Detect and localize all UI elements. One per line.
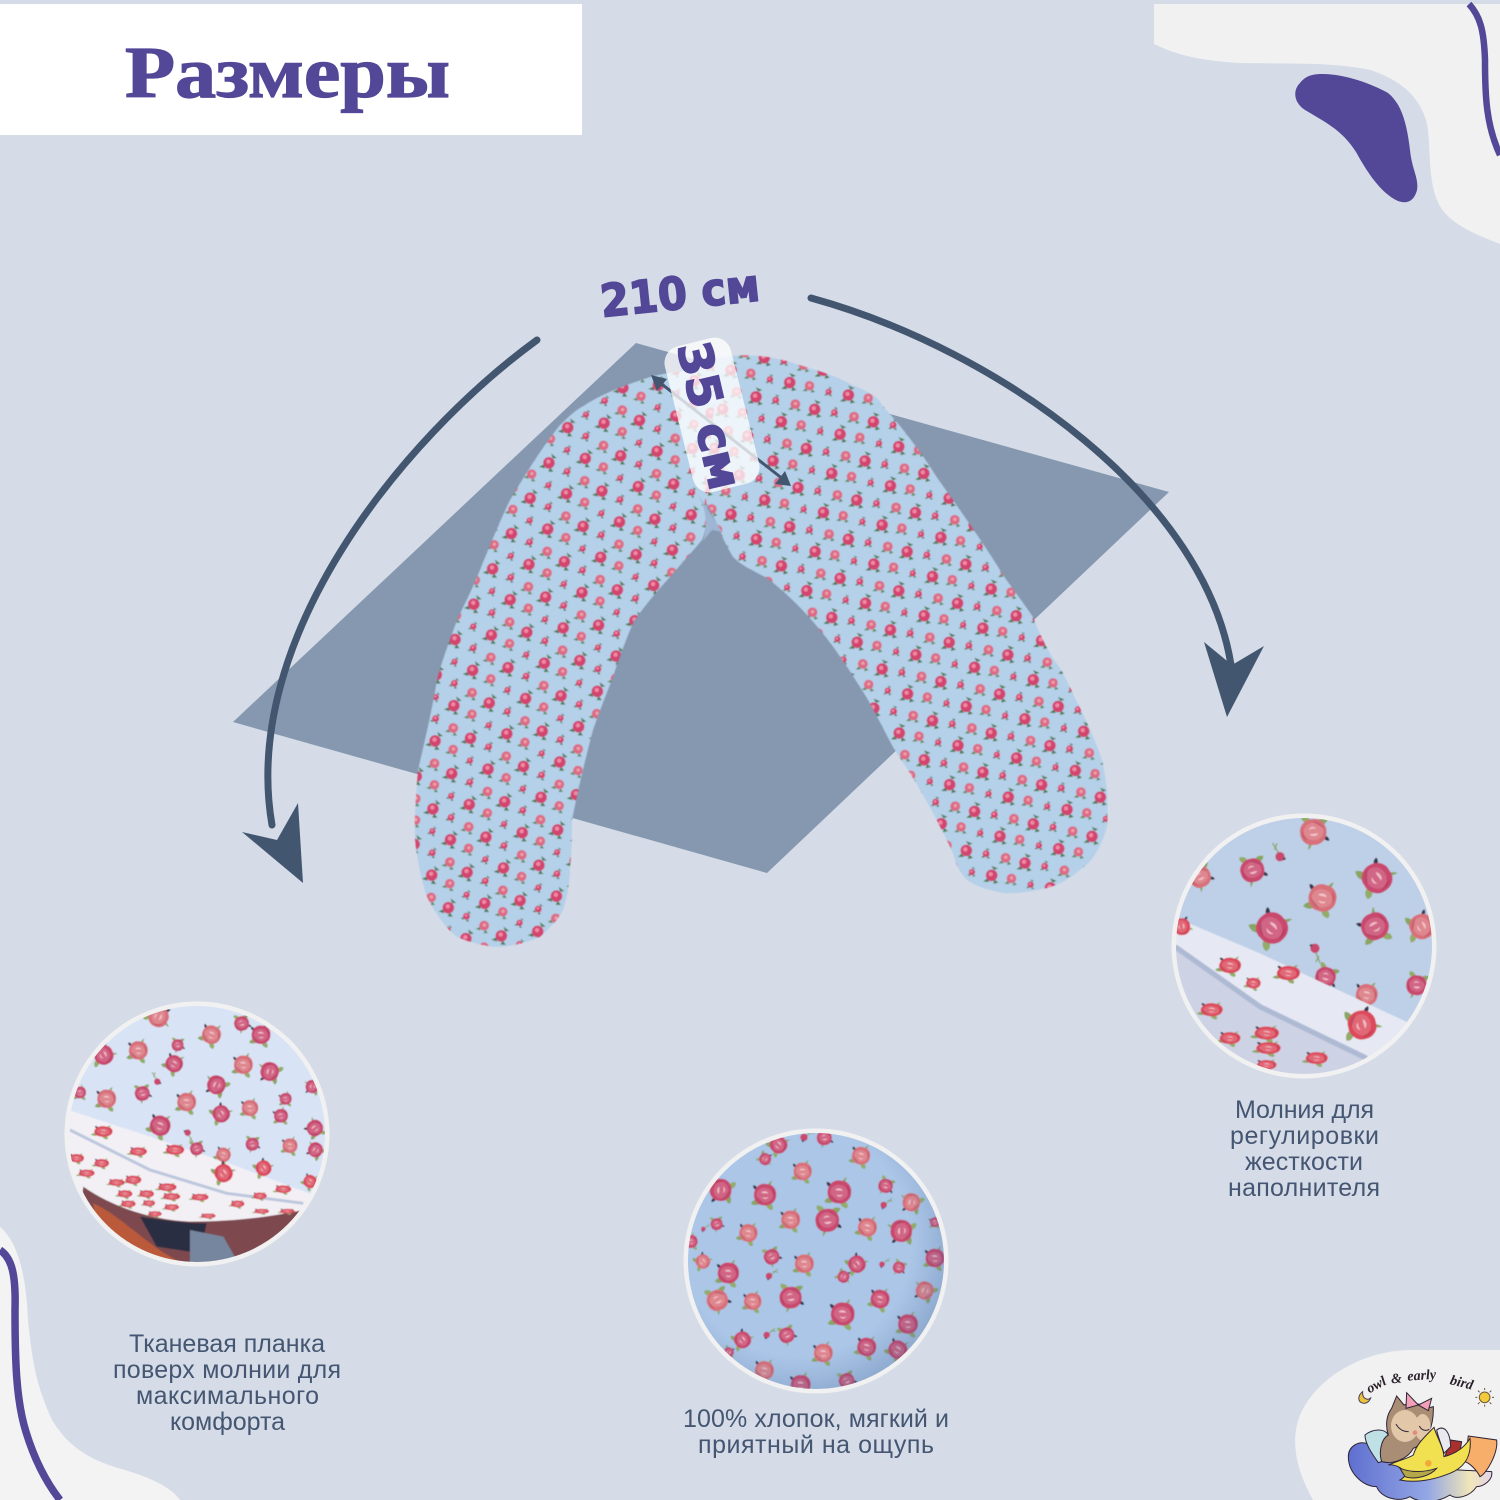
logo wordmark: owl — [1364, 1374, 1389, 1397]
caption: fabric flap — [113, 1330, 341, 1436]
caption: zipper: жесткости — [1245, 1148, 1363, 1176]
logo cloud — [1348, 1443, 1492, 1500]
caption: fabric flap: комфорта — [170, 1408, 285, 1436]
pillow — [415, 355, 1108, 947]
caption: zipper — [1228, 1096, 1380, 1202]
label: 210 cm: 210 см — [598, 259, 762, 328]
logo wordmark: bird — [1448, 1373, 1476, 1394]
logo wordmark: early — [1407, 1368, 1437, 1385]
pillow centre fold — [698, 494, 722, 541]
surface parallelogram — [233, 343, 1169, 873]
logo moon — [1359, 1392, 1371, 1403]
caption: fabric flap: максимального — [136, 1382, 319, 1410]
photo: zipper close-up right — [1167, 810, 1442, 1087]
title panel — [0, 4, 582, 135]
logo: owl and early bird — [1348, 1368, 1497, 1500]
pillow left arm — [415, 368, 715, 947]
decoration: bottom left corner — [0, 1227, 180, 1500]
caption: cotton: приятный на ощупь — [698, 1431, 934, 1459]
caption: zipper: наполнителя — [1228, 1174, 1380, 1202]
photo: fabric flap left — [60, 1000, 335, 1277]
caption: fabric flap: поверх молнии для — [113, 1356, 341, 1384]
caption: zipper: регулировки — [1230, 1122, 1379, 1150]
logo pillows — [1365, 1430, 1497, 1477]
logo sun — [1475, 1388, 1494, 1407]
caption: cotton — [683, 1405, 949, 1459]
logo bird — [1388, 1427, 1470, 1481]
caption: cotton: 100% хлопок, мягкий и — [683, 1405, 949, 1433]
pillow right arm — [690, 355, 1108, 893]
photo: cotton fabric middle — [683, 1126, 950, 1399]
caption: zipper: Молния для — [1235, 1096, 1374, 1124]
arrow: width 35 cm — [651, 375, 791, 486]
logo wordmark: & — [1390, 1371, 1403, 1387]
label: 35 cm: 35 см — [666, 336, 753, 495]
decoration: top right corner — [1154, 4, 1500, 244]
arrow: right 210 cm — [811, 298, 1264, 717]
logo wordmark — [1364, 1368, 1476, 1397]
label pill: 35 cm — [661, 334, 763, 496]
decoration: bottom right corner — [1295, 1350, 1500, 1500]
caption: fabric flap: Тканевая планка — [129, 1330, 325, 1358]
title: Размеры — [125, 32, 450, 113]
arrow: left 210 cm — [242, 340, 537, 883]
logo owl — [1380, 1393, 1433, 1463]
